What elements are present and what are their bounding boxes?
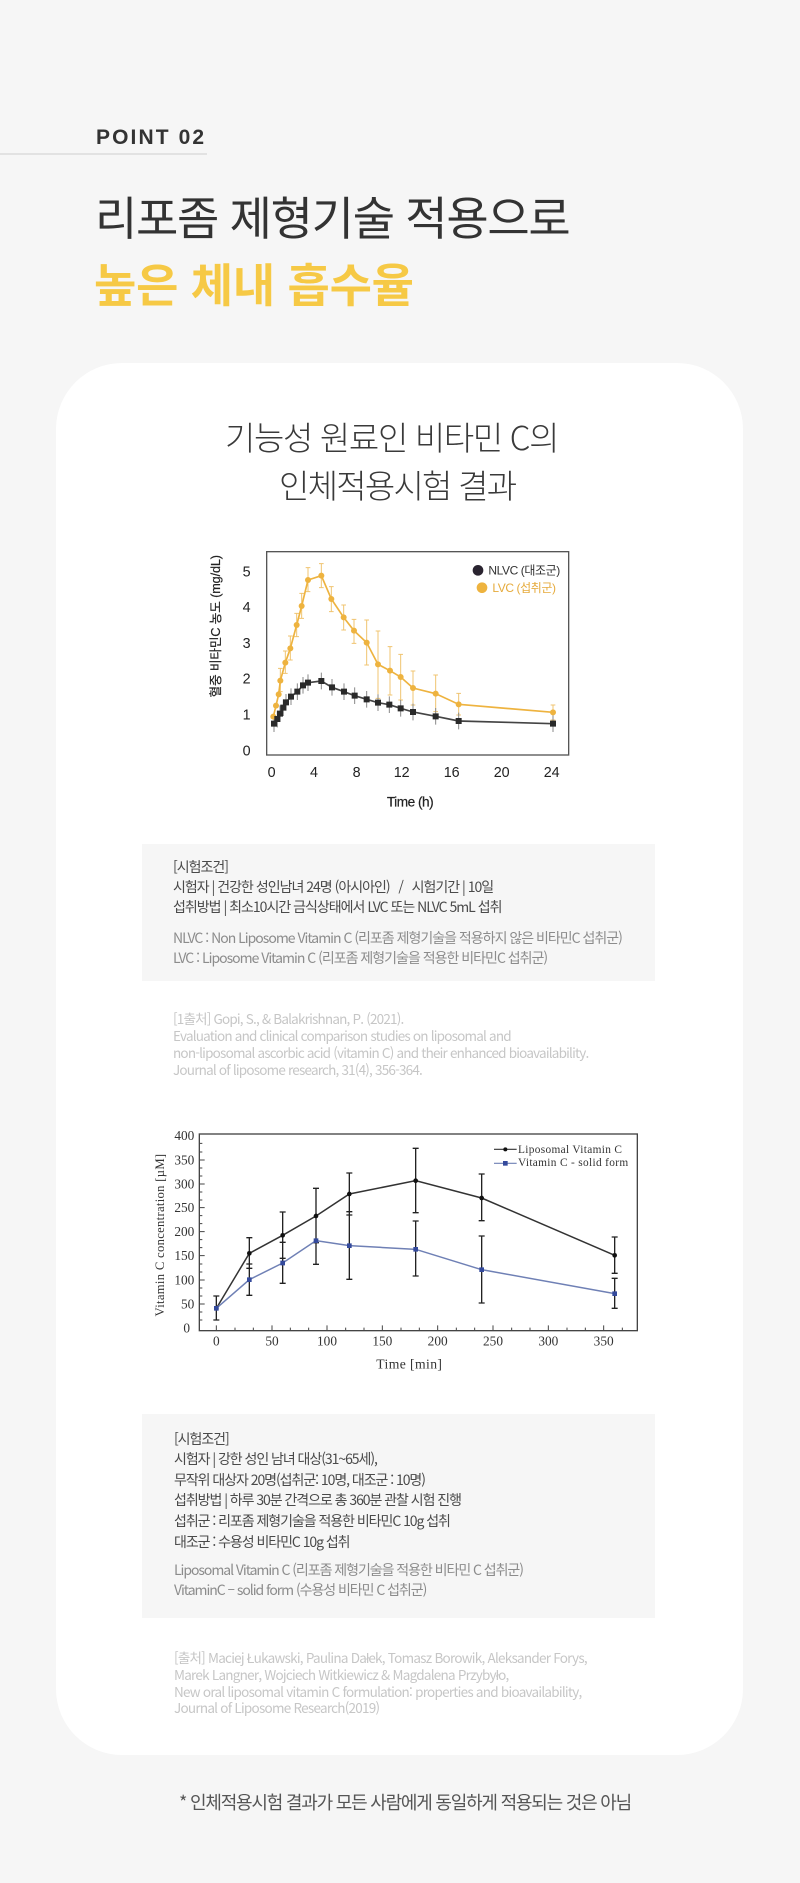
- source citation 2: [출처] Maciej Łukawski, Paulina Dałek, Tomasz Borowik, Aleksander Forys,: [174, 1647, 587, 1667]
- chart: plasma vitamin C concentration: 3: [243, 636, 251, 652]
- panel: test conditions 2: [142, 1414, 655, 1618]
- conditions 1 text: 시험자 | 건강한 성인남녀 24명 (아시아인) / 시험기간 | 10일: [173, 877, 493, 897]
- conditions 1 text: LVC : Liposome Vitamin C (리포좀 제형기술을 적용한 비타민C 섭취군): [173, 948, 547, 968]
- chart: plasma vitamin C concentration: 24: [544, 765, 560, 781]
- source citation 2: New oral liposomal vitamin C formulation: properties and bioavailability,: [174, 1681, 582, 1701]
- chart: vitamin C concentration over time: 350: [594, 1334, 614, 1349]
- chart: plasma vitamin C concentration: 0: [268, 765, 276, 781]
- conditions 1 text: 섭취방법 | 최소10시간 금식상태에서 LVC 또는 NLVC 5mL 섭취: [173, 897, 501, 917]
- source citation 1: [173, 1008, 588, 1079]
- chart: vitamin C concentration over time: 250: [174, 1200, 195, 1215]
- chart: vitamin C concentration over time: 150: [372, 1334, 393, 1349]
- chart: vitamin C concentration over time: 50: [181, 1296, 195, 1311]
- chart: vitamin C concentration over time: 350: [174, 1152, 195, 1167]
- liposomal series: [214, 1178, 617, 1311]
- chart: plasma vitamin C concentration: [209, 551, 570, 810]
- card heading: 인체적용시험 결과: [279, 460, 515, 508]
- chart: vitamin C concentration over time: 300: [174, 1176, 195, 1191]
- conditions 1 text: [173, 857, 622, 968]
- conditions 1 text: [시험조건]: [173, 857, 228, 877]
- chart: plasma vitamin C concentration: 2: [243, 672, 251, 688]
- conditions 2 text: [174, 1429, 523, 1600]
- chart legend: Vitamin C - solid form: [518, 1157, 628, 1169]
- chart: vitamin C concentration over time: 0: [213, 1334, 220, 1349]
- source citation 1: non-liposomal ascorbic acid (vitamin C) and their enhanced bioavailability.: [173, 1042, 588, 1062]
- solid form series: [214, 1238, 617, 1311]
- chart: plasma vitamin C concentration: 16: [444, 765, 460, 781]
- chart: plasma vitamin C concentration: 혈중 비타민C 농도 (mg/dL): [209, 555, 223, 698]
- source citation 2: Marek Langner, Wojciech Witkiewicz & Magdalena Przybyło,: [174, 1664, 509, 1684]
- chart legend: Liposomal Vitamin C: [518, 1144, 622, 1156]
- chart legend: [473, 564, 560, 595]
- conditions 2 text: 대조군 : 수용성 비타민C 10g 섭취: [174, 1532, 350, 1552]
- eyebrow: POINT 02: POINT 02: [96, 126, 206, 149]
- chart: vitamin C concentration over time: Time [min]: [376, 1357, 442, 1372]
- chart: plasma vitamin C concentration: 5: [243, 564, 251, 580]
- chart: plasma vitamin C concentration: 1: [243, 708, 251, 724]
- chart: vitamin C concentration over time: 100: [317, 1334, 337, 1349]
- chart: vitamin C concentration over time: 250: [483, 1334, 503, 1349]
- chart: vitamin C concentration over time: 200: [428, 1334, 448, 1349]
- panel: test conditions 1: [142, 844, 655, 981]
- chart: vitamin C concentration over time: [153, 1128, 638, 1372]
- chart: plasma vitamin C concentration: 8: [353, 765, 361, 781]
- chart: plasma vitamin C concentration: 12: [394, 765, 410, 781]
- LVC series: [270, 573, 556, 720]
- chart: vitamin C concentration over time: 100: [174, 1272, 195, 1287]
- card heading: [225, 412, 558, 508]
- title line 1: 리포좀 제형기술 적용으로: [95, 183, 569, 249]
- conditions 2 text: 섭취방법 | 하루 30분 간격으로 총 360분 관찰 시험 진행: [174, 1490, 461, 1510]
- chart: plasma vitamin C concentration: 0: [243, 744, 251, 760]
- title line 2 highlighted: 높은 체내 흡수율: [94, 250, 414, 316]
- chart: vitamin C concentration over time: 400: [174, 1128, 195, 1143]
- chart: vitamin C concentration over time: 200: [174, 1224, 195, 1239]
- eyebrow underline: [0, 153, 207, 155]
- source citation 2: [174, 1647, 587, 1717]
- chart: vitamin C concentration over time: Vitamin C concentration [µM]: [153, 1154, 167, 1316]
- chart: plasma vitamin C concentration: 4: [243, 600, 251, 616]
- chart: vitamin C concentration over time: 300: [538, 1334, 559, 1349]
- conditions 2 text: 시험자 | 강한 성인 남녀 대상(31~65세),: [174, 1449, 377, 1469]
- conditions 2 text: 섭취군 : 리포좀 제형기술을 적용한 비타민C 10g 섭취: [174, 1511, 450, 1531]
- conditions 2 text: Liposomal Vitamin C (리포좀 제형기술을 적용한 비타민 C 섭취군): [174, 1560, 523, 1580]
- chart: plasma vitamin C concentration: Time (h): [387, 794, 433, 809]
- chart: vitamin C concentration over time: 0: [183, 1320, 190, 1335]
- footnote: * 인체적용시험 결과가 모든 사람에게 동일하게 적용되는 것은 아님: [179, 1789, 631, 1815]
- conditions 2 text: VitaminC – solid form (수용성 비타민 C 섭취군): [174, 1580, 426, 1600]
- chart legend: NLVC (대조군): [488, 564, 560, 578]
- NLVC series: [271, 678, 556, 727]
- conditions 2 text: 무작위 대상자 20명(섭취군: 10명, 대조군 : 10명): [174, 1470, 425, 1490]
- source citation 1: Evaluation and clinical comparison studies on liposomal and: [173, 1025, 511, 1045]
- source citation 1: [1출처] Gopi, S., & Balakrishnan, P. (2021).: [173, 1008, 403, 1028]
- chart: plasma vitamin C concentration: 20: [494, 765, 510, 781]
- panel: clinical result card: [56, 363, 743, 1755]
- card heading: 기능성 원료인 비타민 C의: [225, 412, 558, 460]
- chart: plasma vitamin C concentration: 4: [310, 765, 318, 781]
- chart legend: LVC (섭취군): [492, 581, 556, 595]
- chart: vitamin C concentration over time: 150: [174, 1248, 195, 1263]
- chart legend: [494, 1144, 628, 1169]
- source citation 2: Journal of Liposome Research(2019): [174, 1697, 379, 1717]
- chart: vitamin C concentration over time: 50: [265, 1334, 279, 1349]
- source citation 1: Journal of liposome research, 31(4), 356-364.: [173, 1059, 422, 1079]
- conditions 2 text: [시험조건]: [174, 1429, 229, 1449]
- conditions 1 text: NLVC : Non Liposome Vitamin C (리포좀 제형기술을 적용하지 않은 비타민C 섭취군): [173, 928, 622, 948]
